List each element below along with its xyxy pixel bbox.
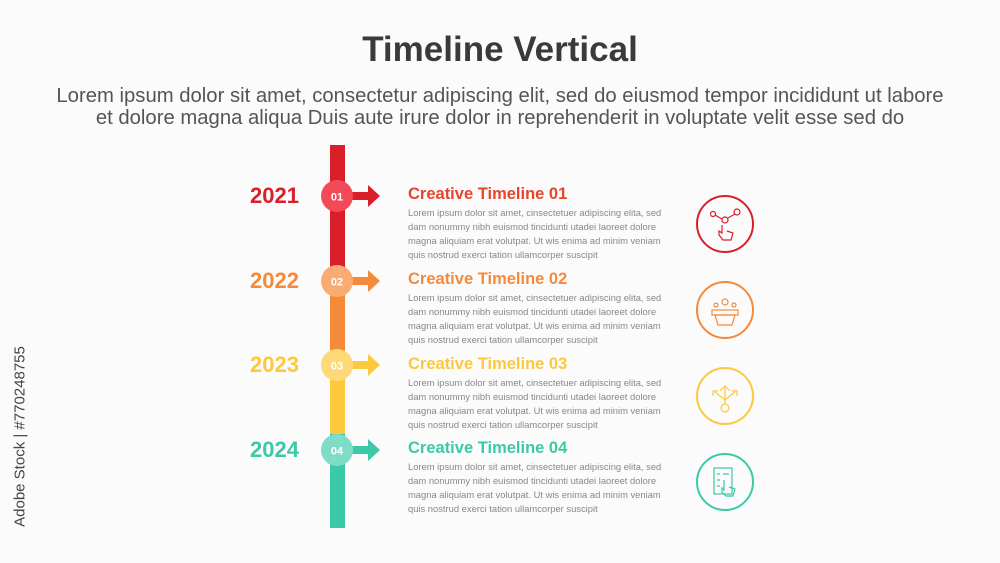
marker 01: 01 — [331, 192, 343, 204]
text: 2023 — [250, 352, 299, 377]
item 2023 — [250, 352, 661, 430]
text: Lorem ipsum dolor sit amet, cinsectetuer adipiscing elita, sed dam nonummy nibh euismod tincidunti utadei laoreet dolore magna aliquiam erat volutpat. Ut wis enima ad minim veniam quis nostrud exerci tation ullamcorper suscipit — [408, 292, 661, 345]
subtitle — [56, 85, 944, 129]
subtitle: et dolore magna aliqua Duis aute irure dolor in reprehenderit in voluptate velit esse sed do — [96, 107, 904, 129]
text: 2022 — [250, 268, 299, 293]
marker 03: 03 — [331, 360, 343, 372]
text: Lorem ipsum dolor sit amet, cinsectetuer adipiscing elita, sed dam nonummy nibh euismod tincidunti utadei laoreet dolore magna aliquiam erat volutpat. Ut wis enima ad minim veniam quis nostrud exerci tation ullamcorper suscipit — [408, 377, 661, 430]
item 2021 — [250, 183, 661, 260]
text: Lorem ipsum dolor sit amet, cinsectetuer adipiscing elita, sed dam nonummy nibh euismod tincidunti utadei laoreet dolore magna aliquiam erat volutpat. Ut wis enima ad minim veniam quis nostrud exerci tation ullamcorper suscipit — [408, 461, 661, 514]
marker 03 — [321, 349, 380, 381]
text: 2024 — [250, 437, 299, 462]
marker 01 — [321, 180, 380, 212]
icon 1 — [697, 196, 753, 252]
title: Timeline Vertical — [362, 30, 638, 69]
timeline bar — [330, 145, 345, 528]
icon 2 — [697, 282, 753, 338]
text: Creative Timeline 03 — [408, 355, 567, 373]
marker 04 — [321, 434, 380, 466]
icon 4 — [697, 454, 753, 510]
text: Creative Timeline 04 — [408, 439, 567, 457]
watermark side text: Adobe Stock | #770248755 — [12, 346, 28, 527]
marker 02 — [321, 265, 380, 297]
text: Lorem ipsum dolor sit amet, cinsectetuer adipiscing elita, sed dam nonummy nibh euismod tincidunti utadei laoreet dolore magna aliquiam erat volutpat. Ut wis enima ad minim veniam quis nostrud exerci tation ullamcorper suscipit — [408, 207, 661, 260]
subtitle: Lorem ipsum dolor sit amet, consectetur adipiscing elit, sed do eiusmod tempor incididunt ut labore — [56, 85, 944, 107]
item 2022 — [250, 268, 661, 345]
text: Creative Timeline 02 — [408, 270, 567, 288]
marker 02: 02 — [331, 276, 343, 288]
marker 04: 04 — [331, 446, 344, 458]
item 2024 — [250, 437, 661, 514]
text: 2021 — [250, 183, 299, 208]
icon 3 — [697, 368, 753, 424]
text: Creative Timeline 01 — [408, 185, 567, 203]
